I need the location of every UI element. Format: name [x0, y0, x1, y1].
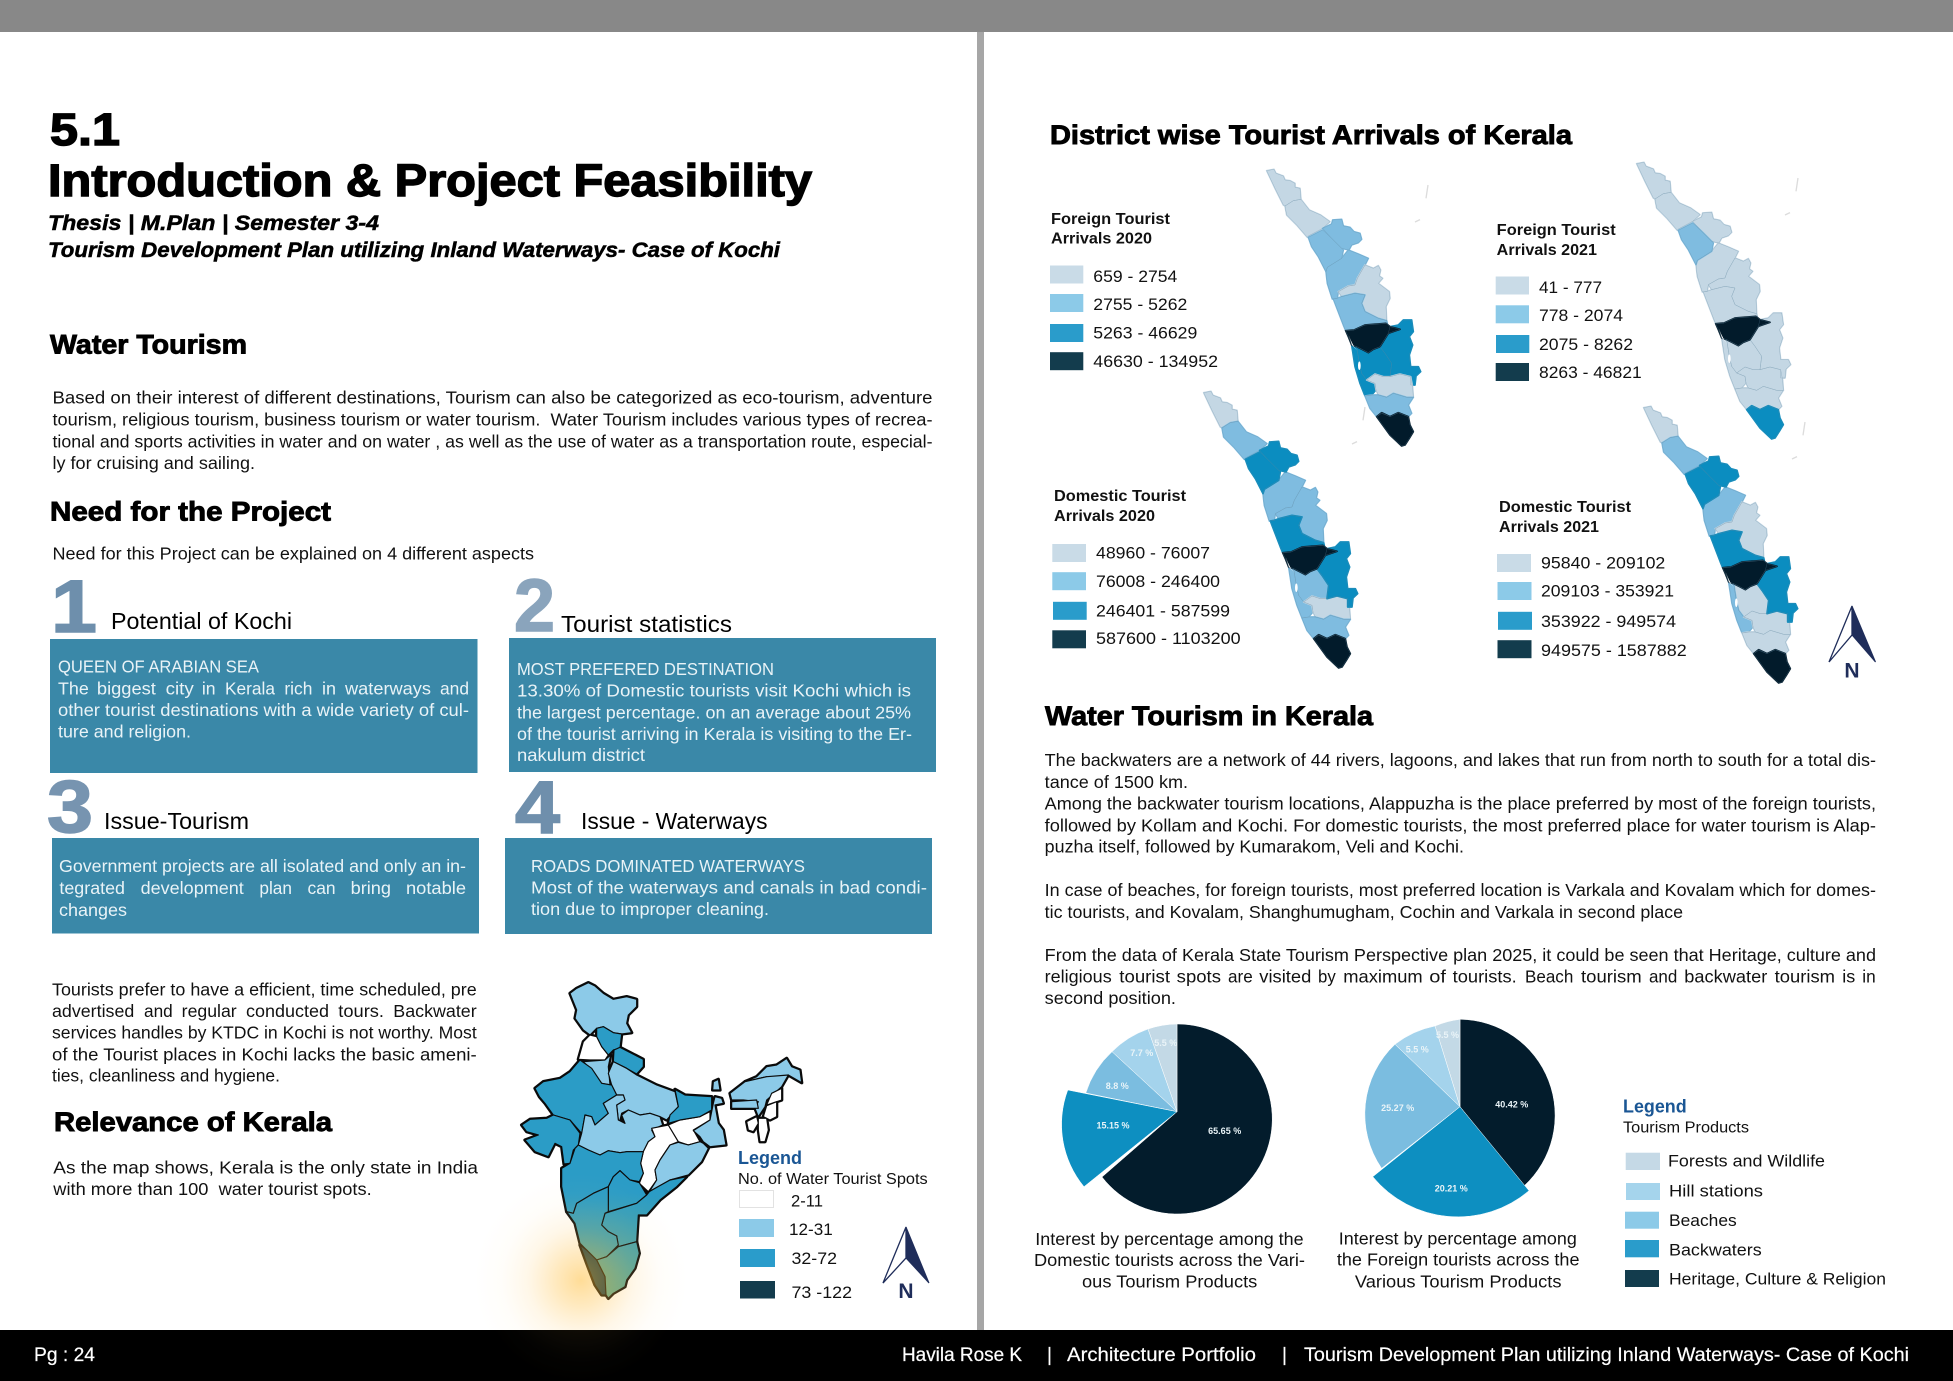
pie labels [1096, 1038, 1241, 1136]
text: water tourism in Kerala [1045, 750, 1876, 1008]
numeral 4: 4 [515, 766, 560, 849]
legend: domestic 2020: 246401 - 587599 [1096, 601, 1230, 620]
section number: 5.1 [50, 104, 120, 155]
text: water tourism: tional and sports activities in water and on water , as well as the use of water as a transportation route, especial- [52, 432, 933, 452]
box 1 text: biggest [97, 678, 156, 698]
swatch 73-122 [740, 1281, 775, 1298]
text: tour preferences: regular [182, 1001, 237, 1021]
box 3 text: Government projects are all isolated and only an in- [59, 856, 466, 876]
text: water tourism: tourism, religious tourism, business tourism or water tourism. Water Tourism includes various types of recrea- [52, 410, 933, 430]
text: tour preferences: advertised [52, 1001, 134, 1021]
heading: water tourism: Water Tourism [50, 330, 247, 360]
legend: foreign 2020: 5263 - 46629 [1093, 323, 1197, 342]
legend: domestic 2020: 48960 - 76007 [1096, 544, 1210, 563]
box 3 [52, 838, 479, 934]
pie labels: 20.21 % [1435, 1184, 1468, 1194]
slice: forests 5.5 [1148, 1024, 1177, 1112]
legend: foreign 2021 [1496, 222, 1642, 382]
separator one: | [1047, 1345, 1052, 1366]
heading: water tourism in Kerala: Water Tourism in Kerala [1045, 701, 1374, 731]
box 3 text: changes [59, 900, 127, 920]
legend: foreign 2021: Foreign Tourist [1497, 222, 1616, 239]
text: water tourism in Kerala: tourist [1119, 967, 1170, 987]
caption: domestic pie: ous Tourism Products [1082, 1271, 1258, 1291]
box 1 text: in [322, 678, 336, 698]
label 2-11: 2-11 [791, 1192, 823, 1211]
separator two: | [1282, 1345, 1287, 1366]
heading 3: Issue-Tourism [104, 808, 249, 834]
centre page divider [977, 32, 984, 1330]
box 3 text: tegrated [59, 878, 125, 898]
legend: domestic 2020: Domestic Tourist [1054, 488, 1186, 505]
text: water tourism in Kerala: From the data of Kerala State Tourism Perspective plan 2025, it could be seen that Heritage, culture and [1045, 945, 1876, 965]
map: domestic arrivals 2020 [1204, 391, 1365, 668]
caption: foreign pie [1337, 1228, 1580, 1291]
label 12-31: 12-31 [789, 1220, 833, 1239]
panel: tourist statistics [509, 564, 936, 772]
box 3 text [59, 856, 466, 920]
box 2 text: 13.30% of Domestic tourists visit Kochi which is [517, 680, 911, 700]
map: India water tourist spots [522, 983, 802, 1298]
box 4 [505, 838, 932, 934]
text: water tourism [52, 388, 933, 473]
pie chart: foreign interest [1365, 1019, 1555, 1217]
text: water tourism in Kerala: maximum [1343, 967, 1423, 987]
pie labels: 65.65 % [1208, 1126, 1241, 1136]
pie labels: 5.5 % [1406, 1044, 1429, 1054]
legend: tourism products: Tourism Products [1623, 1120, 1749, 1137]
box 2 [509, 638, 936, 772]
text: water tourism in Kerala: In case of beaches, for foreign tourists, most preferred location is Varkala and Kovalam which for domes- [1045, 880, 1876, 900]
box 1 text [58, 656, 469, 742]
swatch 32-72 [740, 1249, 775, 1267]
text: water tourism in Kerala: visited [1259, 967, 1311, 987]
top grey bar [0, 0, 1953, 32]
text: water tourism in Kerala: tance of 1500 km. [1045, 772, 1188, 792]
legend subtitle: No. of Water Tourist Spots [738, 1171, 928, 1188]
caption: domestic pie: Interest by percentage among the [1035, 1229, 1304, 1249]
legend: domestic 2021 [1497, 499, 1687, 660]
text: tour preferences: and [144, 1001, 173, 1021]
text: water tourism: Based on their interest of different destinations, Tourism can also be categorized as eco-tourism, adventure [52, 388, 932, 408]
text: water tourism in Kerala: backwater [1684, 967, 1768, 987]
legend: domestic 2021: Domestic Tourist [1499, 499, 1631, 516]
slice: hill stations 5.5 [1395, 1026, 1460, 1107]
swatch 2-11 [740, 1190, 774, 1208]
numeral 1: 1 [51, 565, 97, 648]
text: tour preferences [52, 980, 477, 1086]
glow: Kerala highlight [475, 1174, 687, 1381]
text: water tourism in Kerala: followed by Kollam and Kochi. For domestic tourists, the most preferred place for water tourism is Alap- [1045, 816, 1876, 836]
heading: district wise arrivals: District wise Tourist Arrivals of Kerala [1050, 120, 1573, 150]
box 1 text: QUEEN OF ARABIAN SEA [58, 656, 259, 676]
pie labels: 40.42 % [1495, 1100, 1528, 1110]
text: water tourism in Kerala: puzha itself, followed by Kumarakom, Veli and Kochi. [1045, 837, 1464, 857]
text: relevance: As the map shows, Kerala is the only state in India [53, 1158, 478, 1178]
icon: north arrow India [883, 1227, 929, 1303]
caption: foreign pie: Various Tourism Products [1355, 1271, 1562, 1291]
text: tour preferences: tours. [338, 1001, 384, 1021]
caption: foreign pie: Interest by percentage among [1339, 1228, 1577, 1248]
legend: foreign 2021: 41 - 777 [1539, 278, 1602, 297]
caption: foreign pie: the Foreign tourists across the [1337, 1250, 1580, 1270]
pie labels: 5.5 % [1154, 1038, 1177, 1048]
box 2 text [517, 659, 912, 765]
box 1 text: and [440, 678, 469, 698]
legend: tourism products: Legend [1623, 1097, 1687, 1117]
heading 2: Tourist statistics [561, 611, 732, 637]
heading 1: Potential of Kochi [111, 608, 292, 634]
caption: domestic pie: Domestic tourists across the Vari- [1034, 1250, 1305, 1270]
panel: potential of Kochi [50, 565, 478, 773]
box 4 text: Most of the waterways and canals in bad condi- [531, 878, 927, 898]
text: water tourism in Kerala: Among the backwater tourism locations, Alappuzha is the place preferred by most of the foreign tourists, [1045, 794, 1876, 814]
legend: tourism products: Heritage, Culture & Religion [1669, 1269, 1886, 1288]
box 1 [50, 639, 478, 773]
legend: domestic 2021: 353922 - 949574 [1541, 612, 1676, 631]
box 1 text: ture and religion. [58, 722, 191, 742]
legend: foreign 2021: 2075 - 8262 [1539, 335, 1633, 354]
legend: India map [738, 1148, 928, 1302]
box 4 text [531, 856, 927, 919]
text: need intro: Need for this Project can be explained on 4 different aspects [52, 544, 534, 564]
box 3 text: notable [406, 878, 466, 898]
legend: foreign 2020: Arrivals 2020 [1051, 230, 1152, 248]
pie labels: 25.27 % [1381, 1103, 1414, 1113]
slice: backwaters 15.15 [1062, 1090, 1177, 1187]
text: water tourism in Kerala: Beach [1525, 967, 1573, 987]
numeral 2: 2 [514, 564, 555, 647]
legend: foreign 2020: 46630 - 134952 [1093, 352, 1218, 371]
legend: domestic 2021: 209103 - 353921 [1541, 582, 1674, 600]
text: water tourism in Kerala: religious [1045, 967, 1112, 987]
legend: foreign 2020: 2755 - 5262 [1093, 295, 1187, 314]
footer bar [0, 1330, 1953, 1381]
legend: tourism products: Forests and Wildlife [1668, 1152, 1825, 1171]
heading 4: Issue - Waterways [581, 808, 768, 834]
box 3 text: can [308, 878, 336, 898]
portfolio: Architecture Portfolio [1067, 1345, 1256, 1366]
text: water tourism in Kerala: tourists. [1453, 967, 1517, 987]
text: water tourism in Kerala: second position. [1045, 988, 1176, 1008]
subtitle [48, 212, 781, 262]
subtitle: Thesis | M.Plan | Semester 3-4 [48, 212, 379, 235]
box 3 text: development [141, 878, 244, 898]
text: relevance: with more than 100 water tourist spots. [52, 1179, 372, 1199]
panel: issue tourism [47, 765, 479, 934]
legend: foreign 2021: 8263 - 46821 [1539, 363, 1642, 382]
project name: Tourism Development Plan utilizing Inland Waterways- Case of Kochi [1304, 1345, 1909, 1366]
legend: domestic 2020: 76008 - 246400 [1096, 572, 1220, 591]
text: water tourism in Kerala: by [1318, 967, 1336, 987]
text: tour preferences: services handles by KTDC in Kochi is not worthy. Most [52, 1022, 477, 1042]
box 2 text: MOST PREFERED DESTINATION [517, 659, 774, 679]
legend: domestic 2021: 95840 - 209102 [1541, 554, 1665, 572]
label 73-122: 73 -122 [792, 1283, 852, 1302]
box 1 text: Kerala [225, 678, 275, 698]
panel: issue waterways [505, 766, 932, 934]
box 3 text: plan [259, 878, 292, 898]
label 32-72: 32-72 [792, 1249, 837, 1268]
slice: beaches 25.27 [1365, 1044, 1460, 1168]
text: water tourism in Kerala: tic tourists, and Kovalam, Shanghumugham, Cochin and Varkala in second place [1045, 902, 1683, 922]
legend: domestic 2021: Arrivals 2021 [1499, 519, 1599, 536]
caption: domestic pie [1034, 1229, 1305, 1291]
title: Introduction & Project Feasibility [48, 155, 812, 206]
legend: foreign 2020: 659 - 2754 [1093, 267, 1177, 286]
pie chart: domestic interest [1062, 1024, 1272, 1214]
slice: beaches 8.8 [1086, 1052, 1177, 1112]
pie labels: 7.7 % [1130, 1048, 1153, 1058]
author: Havila Rose K [902, 1345, 1022, 1366]
legend: tourism products: Beaches [1669, 1211, 1737, 1230]
text: water tourism in Kerala: spots [1177, 967, 1221, 987]
text: water tourism in Kerala: are [1228, 967, 1253, 987]
swatch 12-31 [739, 1219, 774, 1237]
legend: foreign 2021: 778 - 2074 [1539, 306, 1623, 325]
map: domestic arrivals 2021 [1644, 406, 1805, 683]
legend: foreign 2021: Arrivals 2021 [1497, 242, 1597, 259]
pie labels: 5.5 % [1436, 1030, 1459, 1040]
box 4 text: ROADS DOMINATED WATERWAYS [531, 856, 805, 876]
legend: foreign 2020 [1050, 211, 1218, 371]
text: water tourism in Kerala: tourism [1775, 967, 1835, 987]
slice: hill stations 7.7 [1112, 1029, 1177, 1112]
text: tour preferences: of the Tourist places in Kochi lacks the basic ameni- [52, 1044, 477, 1064]
text: tour preferences: Tourists prefer to have a efficient, time scheduled, pre [52, 980, 477, 1000]
legend: tourism products: Hill stations [1669, 1182, 1763, 1201]
legend: domestic 2021: 949575 - 1587882 [1541, 641, 1687, 660]
box 1 text: rich [284, 678, 312, 698]
text: water tourism in Kerala: and [1649, 967, 1677, 987]
box 1 text: waterways [344, 678, 431, 698]
pie labels: 8.8 % [1106, 1081, 1129, 1091]
numeral 3: 3 [47, 765, 93, 848]
text: water tourism in Kerala: in [1862, 967, 1876, 987]
text: water tourism: ly for cruising and sailing. [52, 453, 255, 473]
legend: tourism products [1623, 1097, 1886, 1288]
box 1 text: The [58, 678, 89, 698]
slice: forests 5.5 [1435, 1019, 1460, 1107]
text: tour preferences: conducted [246, 1001, 329, 1021]
map: foreign arrivals 2020 [1267, 169, 1428, 446]
text: relevance [52, 1158, 478, 1199]
legend: domestic 2020: Arrivals 2020 [1054, 508, 1155, 525]
box 2 text: the largest percentage. on an average about 25% [517, 702, 911, 722]
box 1 text: other tourist destinations with a wide variety of cul- [58, 700, 469, 720]
legend heading: Legend [738, 1148, 802, 1168]
icon: north arrow Kerala: N [1844, 660, 1860, 682]
legend: domestic 2020: 587600 - 1103200 [1096, 629, 1241, 648]
map: foreign arrivals 2021 [1637, 162, 1798, 439]
slice: heritage 40.42 [1460, 1019, 1555, 1186]
box 4 text: tion due to improper cleaning. [531, 899, 769, 919]
icon: north arrow India: N [898, 1280, 914, 1303]
legend: tourism products: Backwaters [1669, 1241, 1762, 1260]
heading: need for the project: Need for the Project [50, 496, 331, 526]
pie labels [1381, 1030, 1528, 1194]
heading: relevance of Kerala: Relevance of Kerala [54, 1107, 333, 1137]
legend: foreign 2020: Foreign Tourist [1051, 211, 1170, 228]
text: water tourism in Kerala: of [1429, 967, 1446, 987]
legend: domestic 2020 [1052, 488, 1241, 648]
box 3 text: bring [351, 878, 391, 898]
slice: backwaters 20.21 [1373, 1107, 1529, 1217]
box 1 text: in [202, 678, 216, 698]
text: water tourism in Kerala: tourism [1581, 967, 1642, 987]
box 1 text: city [166, 678, 194, 698]
icon: north arrow Kerala [1829, 606, 1876, 682]
box 2 text: of the tourist arriving in Kerala is visiting to the Er- [517, 724, 912, 744]
text: water tourism in Kerala: is [1842, 967, 1856, 987]
text: tour preferences: ties, cleanliness and hygiene. [52, 1066, 280, 1086]
text: tour preferences: Backwater [393, 1001, 477, 1021]
box 2 text: nakulum district [517, 745, 645, 765]
pie labels: 15.15 % [1096, 1120, 1130, 1130]
text: water tourism in Kerala: The backwaters are a network of 44 rivers, lagoons, and lakes that run from north to south for a total dis- [1045, 750, 1876, 770]
slice: heritage 65.65 [1102, 1024, 1272, 1214]
subtitle: Tourism Development Plan utilizing Inland Waterways- Case of Kochi [48, 239, 781, 262]
page number: Pg : 24 [34, 1345, 95, 1366]
